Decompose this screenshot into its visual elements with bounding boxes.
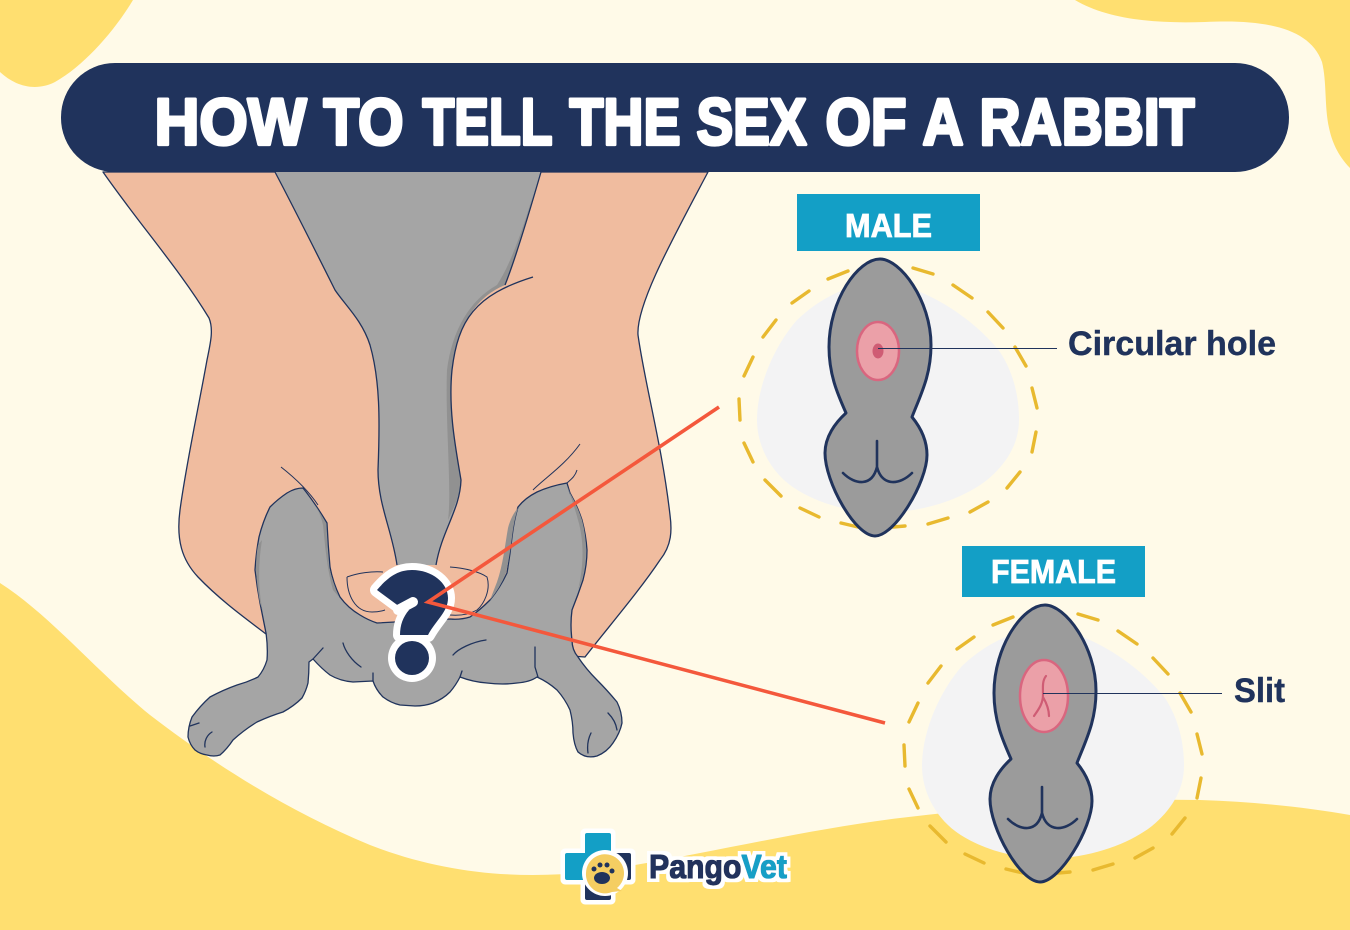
panel: female — [904, 605, 1202, 882]
rabbit underside — [825, 259, 931, 536]
background wave: bottom — [0, 583, 1350, 930]
leader line: slit — [1043, 692, 1222, 694]
background blob: top left — [0, 0, 133, 87]
title banner: TELL — [422, 86, 552, 159]
torso outline — [275, 172, 541, 565]
text: slit: Slit — [1234, 672, 1285, 710]
title banner — [61, 63, 1289, 172]
slit — [1034, 676, 1049, 716]
circular hole — [872, 344, 884, 358]
rabbit underside — [990, 605, 1096, 882]
toes and belly creases — [190, 640, 617, 753]
soft background blob — [757, 282, 1019, 513]
label: female — [962, 546, 1145, 597]
icon: question mark — [377, 570, 448, 682]
finger lines and fingernails — [281, 444, 580, 615]
label: female: FEMALE — [991, 553, 1116, 590]
background blob: top right — [1075, 0, 1350, 168]
arrow lines: pointer to male and female — [428, 407, 885, 723]
text: circular hole: Circular hole — [1068, 325, 1276, 363]
hands — [103, 172, 708, 657]
genital area — [1020, 660, 1068, 732]
panel: male — [739, 259, 1037, 536]
title banner: OF — [826, 86, 906, 159]
tail creases — [843, 441, 912, 482]
tail creases — [1008, 787, 1077, 828]
torso shadow — [447, 195, 533, 520]
dashed ring — [739, 268, 1037, 527]
illustration: hands holding rabbit — [103, 172, 708, 757]
title banner: THE — [570, 86, 680, 159]
label: male: MALE — [845, 207, 932, 244]
title banner: HOW — [154, 86, 307, 159]
soft background blob — [922, 628, 1184, 859]
rabbit hind legs and belly — [188, 483, 622, 757]
title banner: A — [922, 86, 963, 159]
title banner: TO — [324, 86, 404, 159]
dashed ring — [904, 614, 1202, 873]
rabbit torso — [275, 172, 541, 565]
label: male — [797, 194, 980, 251]
logo: PangoVet — [565, 833, 787, 900]
title banner: SEX — [696, 86, 806, 159]
leader line: circular hole — [878, 348, 1057, 350]
title banner: RABBIT — [980, 86, 1195, 159]
logo wordmark: PangoVet — [649, 848, 787, 885]
icon: medical cross with paw — [565, 833, 631, 900]
leg shadows — [256, 485, 586, 612]
genital area — [857, 322, 899, 380]
